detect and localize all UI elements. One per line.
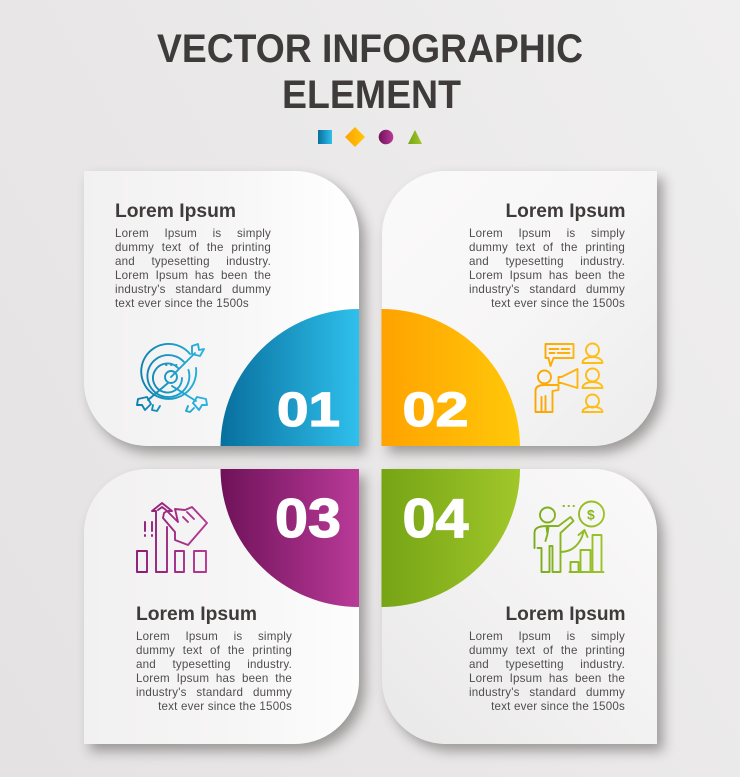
text block: 01: industry's standard dummy (115, 283, 271, 296)
text block: 03: and typesetting industry. (136, 658, 292, 671)
text block: 03: industry's standard dummy (136, 686, 292, 699)
text block: 02 (469, 226, 625, 310)
text block: 02: Lorem Ipsum has been the (469, 269, 625, 282)
text block: 04: text ever since the 1500s (491, 700, 625, 713)
text block: 03: Lorem Ipsum has been the (136, 672, 292, 685)
heading: 01: Lorem Ipsum (115, 201, 236, 222)
panel: 03 (84, 469, 359, 744)
panel: 01 (84, 171, 359, 446)
title (157, 27, 583, 117)
text block: 03: dummy text of the printing (136, 644, 292, 657)
panel: 04 (382, 469, 656, 744)
quarter circle: purple (220, 469, 359, 607)
quarter circle: green (381, 469, 520, 607)
heading: 04: Lorem Ipsum (505, 604, 625, 625)
text block: 02: Lorem Ipsum is simply (469, 226, 625, 240)
number 03: 03 (275, 487, 341, 549)
text block: 04: Lorem Ipsum is simply (469, 630, 625, 642)
quarter circle: blue (220, 309, 359, 446)
quarter circle: orange (381, 309, 520, 446)
text block: 04: Lorem Ipsum has been the (469, 672, 625, 685)
text block: 04: industry's standard dummy (469, 686, 625, 699)
text block: 01: dummy text of the printing (115, 241, 271, 254)
title: ELEMENT (282, 73, 461, 117)
number 04: 04 (402, 487, 468, 549)
text block: 03: text ever since the 1500s (158, 700, 292, 713)
text block: 01: text ever since the 1500s (115, 297, 249, 310)
number 02: 02 (402, 384, 468, 437)
text block: 04: and typesetting industry. (469, 658, 625, 671)
heading: 03: Lorem Ipsum (136, 604, 257, 625)
text block: 01: and typesetting industry. (115, 255, 271, 268)
text block: 02: industry's standard dummy (469, 283, 625, 296)
text block: 04: dummy text of the printing (469, 644, 625, 657)
legend shapes (318, 127, 422, 147)
number 01: 01 (277, 384, 340, 437)
text block: 03 (136, 630, 292, 713)
text block: 01 (115, 226, 271, 310)
text block: 01: Lorem Ipsum has been the (115, 269, 271, 282)
text block: 04 (469, 630, 625, 713)
icon: target with arrows (137, 344, 207, 412)
panel: 02 (382, 171, 656, 446)
icon: hand and bars (137, 503, 207, 572)
icon: dollar sign: $ (586, 506, 594, 522)
text block: 03: Lorem Ipsum is simply (136, 630, 292, 642)
icon: businessman and growth chart (534, 502, 604, 572)
text block: 02: dummy text of the printing (469, 241, 625, 254)
heading: 02: Lorem Ipsum (505, 201, 625, 222)
text block: 01: Lorem Ipsum is simply (115, 226, 271, 240)
text block: 02: text ever since the 1500s (491, 297, 625, 310)
icon: presenter with audience (535, 344, 602, 412)
text block: 02: and typesetting industry. (469, 255, 625, 268)
